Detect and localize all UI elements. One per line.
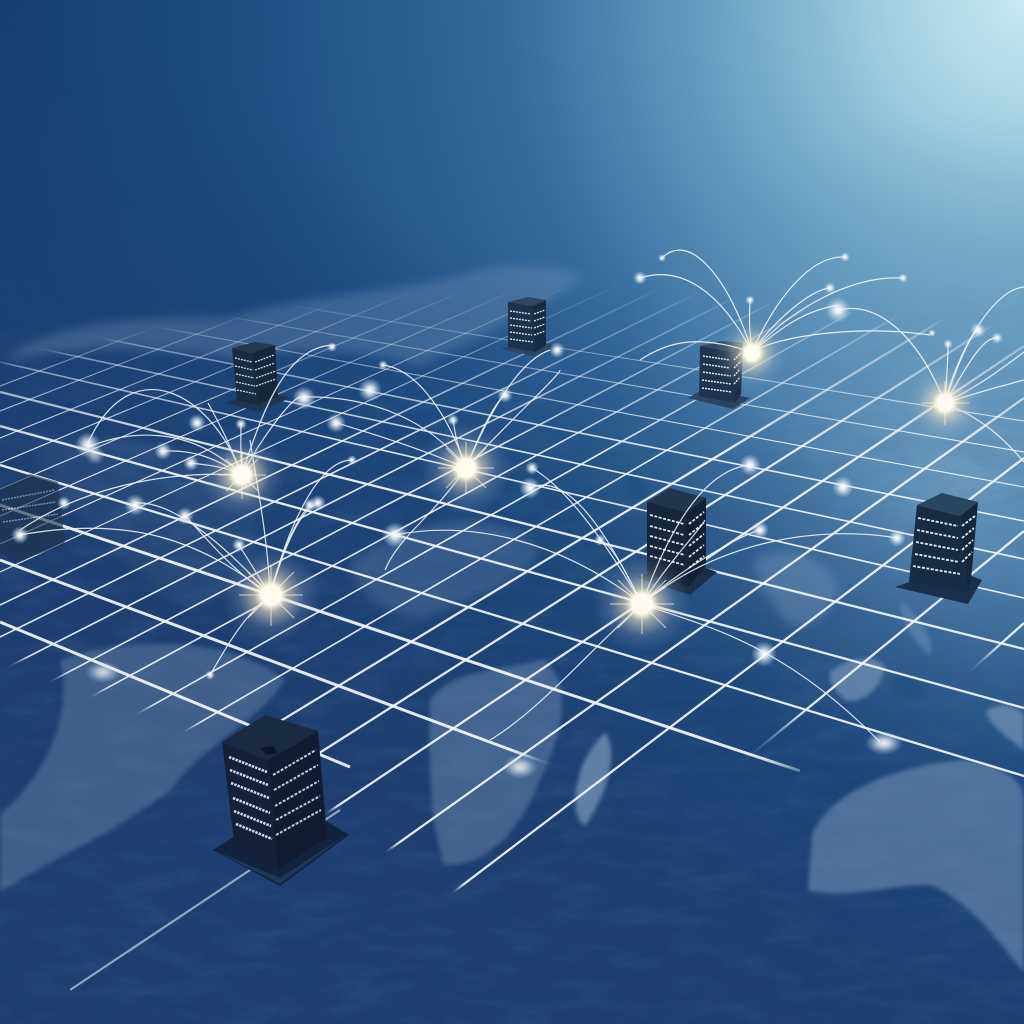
server: back centre: [500, 297, 560, 356]
hub glow: top: [714, 315, 790, 391]
connection arcs: lower left hub: [20, 440, 352, 675]
hub glow: centre: [420, 422, 512, 514]
grid lines going down-right: [0, 307, 1024, 778]
server: back right: [688, 341, 750, 409]
connection arcs: centre right hub: [395, 465, 897, 742]
server: foreground: [213, 715, 349, 886]
hub glow: right: [905, 363, 985, 443]
server: centre: [638, 488, 717, 595]
connection arcs: top hub: [640, 250, 945, 403]
connection arcs: centre hub: [300, 350, 560, 570]
hub glow: far left: [198, 431, 286, 519]
grid lines going up-right: [0, 290, 1024, 894]
map texture: [958, 441, 997, 461]
hub glow: lower left: [221, 545, 321, 645]
ground landing nodes: [85, 661, 903, 779]
world map continents: [0, 266, 1024, 972]
server: far left: [0, 474, 65, 562]
long lower grid lines: [70, 810, 340, 990]
connection arcs: far left hub: [20, 345, 335, 530]
server: right: [895, 493, 982, 604]
small network nodes: [11, 252, 1003, 680]
map water and island details: [499, 474, 931, 699]
hub glow: centre right: [592, 554, 692, 654]
server: back left: [226, 342, 290, 412]
connection arcs: right hub: [945, 287, 1024, 462]
